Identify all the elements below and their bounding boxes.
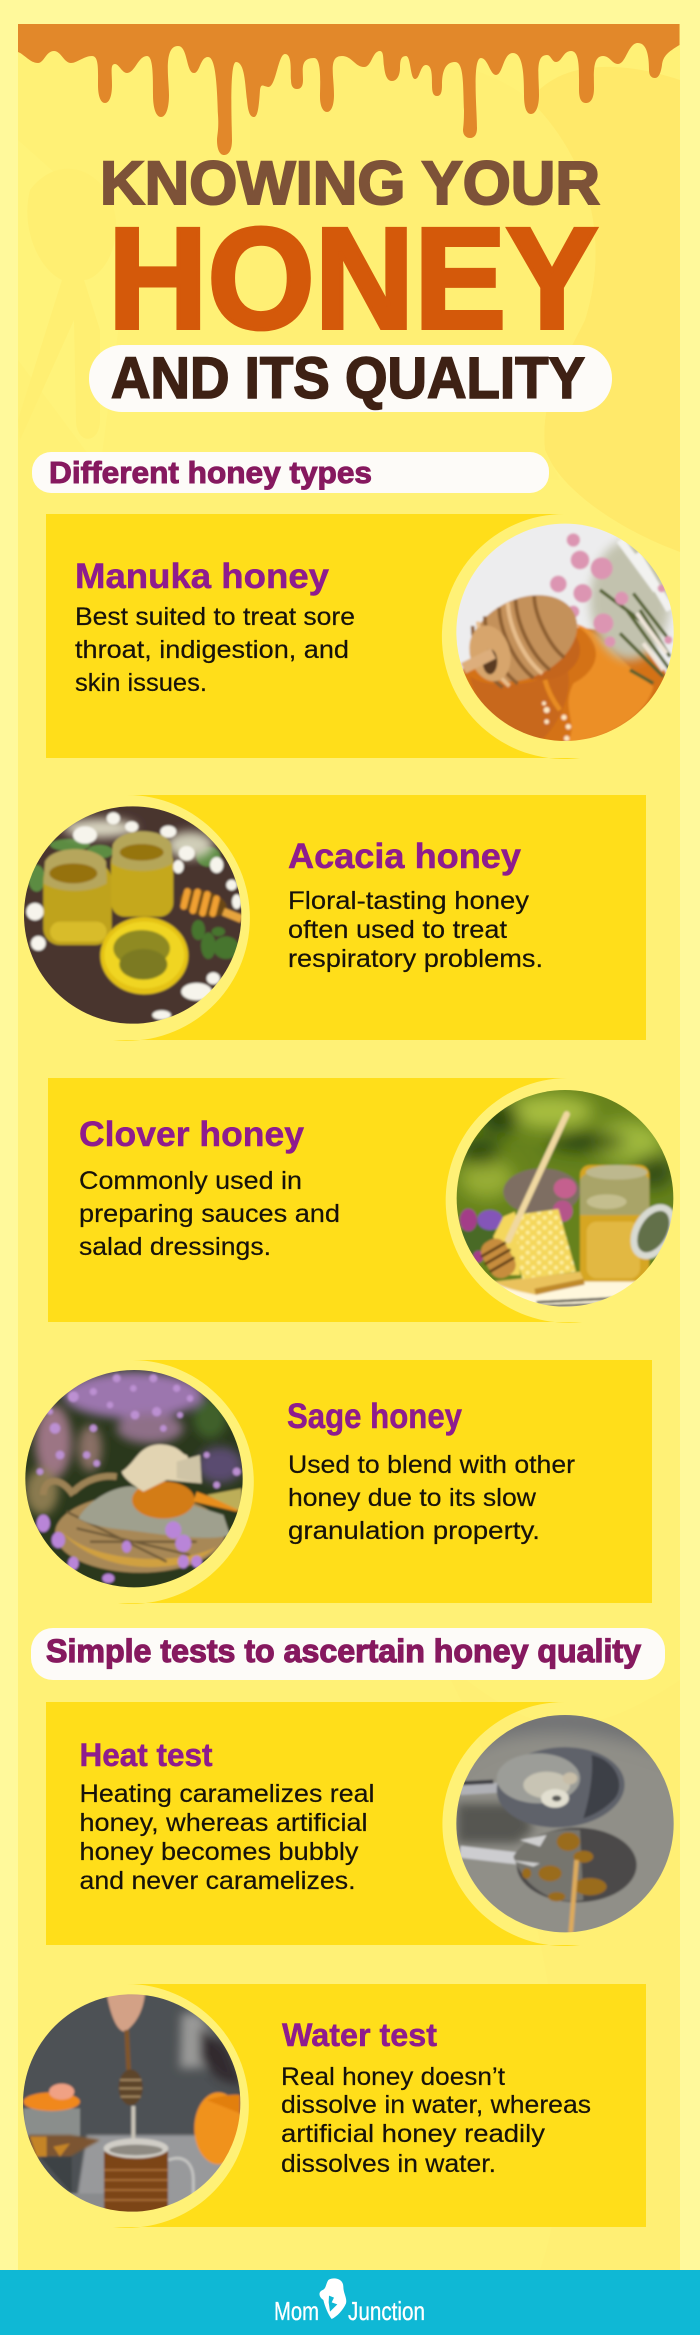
text: acacia description: Floral-tasting honey xyxy=(288,887,530,915)
text: manuka description: skin issues. xyxy=(75,669,207,697)
section heading: simple tests: Simple tests to ascertain honey quality xyxy=(46,1633,641,1669)
text: manuka description: throat, indigestion, and xyxy=(75,636,349,664)
panel: sage honey xyxy=(20,1360,652,1604)
panel: clover honey xyxy=(48,1078,683,1323)
text: heat test description: honey, whereas artificial xyxy=(80,1809,368,1837)
text: clover description: preparing sauces and xyxy=(79,1200,340,1228)
photo: spoons heat test xyxy=(456,1715,674,1932)
text: heat test description: and never caramelizes. xyxy=(80,1867,356,1895)
text: heat test description: Heating caramelizes real xyxy=(80,1780,374,1808)
text: heat test description xyxy=(80,1780,374,1895)
honey drip band xyxy=(18,24,680,155)
photo: manuka honey dipper xyxy=(456,524,674,741)
photo: dipper over honey cup xyxy=(23,1994,240,2212)
text: water test description: artificial honey readily xyxy=(281,2120,546,2148)
text: heat test description: honey becomes bubbly xyxy=(80,1838,359,1866)
photo: clover honeycomb and jar xyxy=(456,1090,674,1307)
text: acacia description: respiratory problems. xyxy=(288,945,543,973)
heading: sage honey: Sage honey xyxy=(287,1397,462,1436)
title pill: AND ITS QUALITY xyxy=(111,346,585,411)
heading: acacia honey: Acacia honey xyxy=(288,837,522,876)
text: manuka description: Best suited to treat sore xyxy=(75,603,355,631)
title xyxy=(89,149,612,412)
text: sage description: granulation property. xyxy=(288,1517,540,1545)
photo: acacia honey jars xyxy=(24,806,242,1024)
panel: water test xyxy=(17,1984,646,2228)
text: sage description: Used to blend with other xyxy=(288,1451,575,1479)
panel: heat test xyxy=(46,1702,683,1946)
text: water test description: Real honey doesn’t xyxy=(281,2063,505,2091)
text: acacia description xyxy=(288,887,543,973)
text: water test description: dissolves in water. xyxy=(281,2150,496,2178)
text: acacia description: often used to treat xyxy=(288,916,507,944)
text: water test description: dissolve in water, whereas xyxy=(281,2091,591,2119)
heading: clover honey: Clover honey xyxy=(79,1115,305,1154)
heading: heat test: Heat test xyxy=(80,1737,213,1773)
heading: manuka honey: Manuka honey xyxy=(75,557,330,596)
text: clover description: Commonly used in xyxy=(79,1167,302,1195)
text: sage description: honey due to its slow xyxy=(288,1484,537,1512)
logo: momjunction: Mom xyxy=(274,2296,319,2326)
section heading: different honey types: Different honey types xyxy=(49,455,372,490)
text: sage description xyxy=(288,1451,575,1545)
heading: water test: Water test xyxy=(282,2017,437,2053)
section heading: simple tests xyxy=(31,1628,665,1680)
logo: momjunction: Junction xyxy=(348,2296,425,2326)
panel: manuka honey xyxy=(46,514,683,759)
logo icon: mother and child xyxy=(319,2278,346,2319)
text: clover description: salad dressings. xyxy=(79,1233,271,1261)
title line: honey: HONEY xyxy=(108,198,598,359)
text: manuka description xyxy=(75,603,355,697)
photo: sage flowers and honey basket xyxy=(25,1370,243,1588)
text: water test description xyxy=(281,2063,591,2178)
footer band xyxy=(0,2270,700,2335)
logo: momjunction xyxy=(274,2278,425,2326)
section heading: different honey types xyxy=(32,452,549,493)
title line: knowing your: KNOWING YOUR xyxy=(100,149,600,217)
text: clover description xyxy=(79,1167,340,1261)
panel: acacia honey xyxy=(17,795,646,1041)
